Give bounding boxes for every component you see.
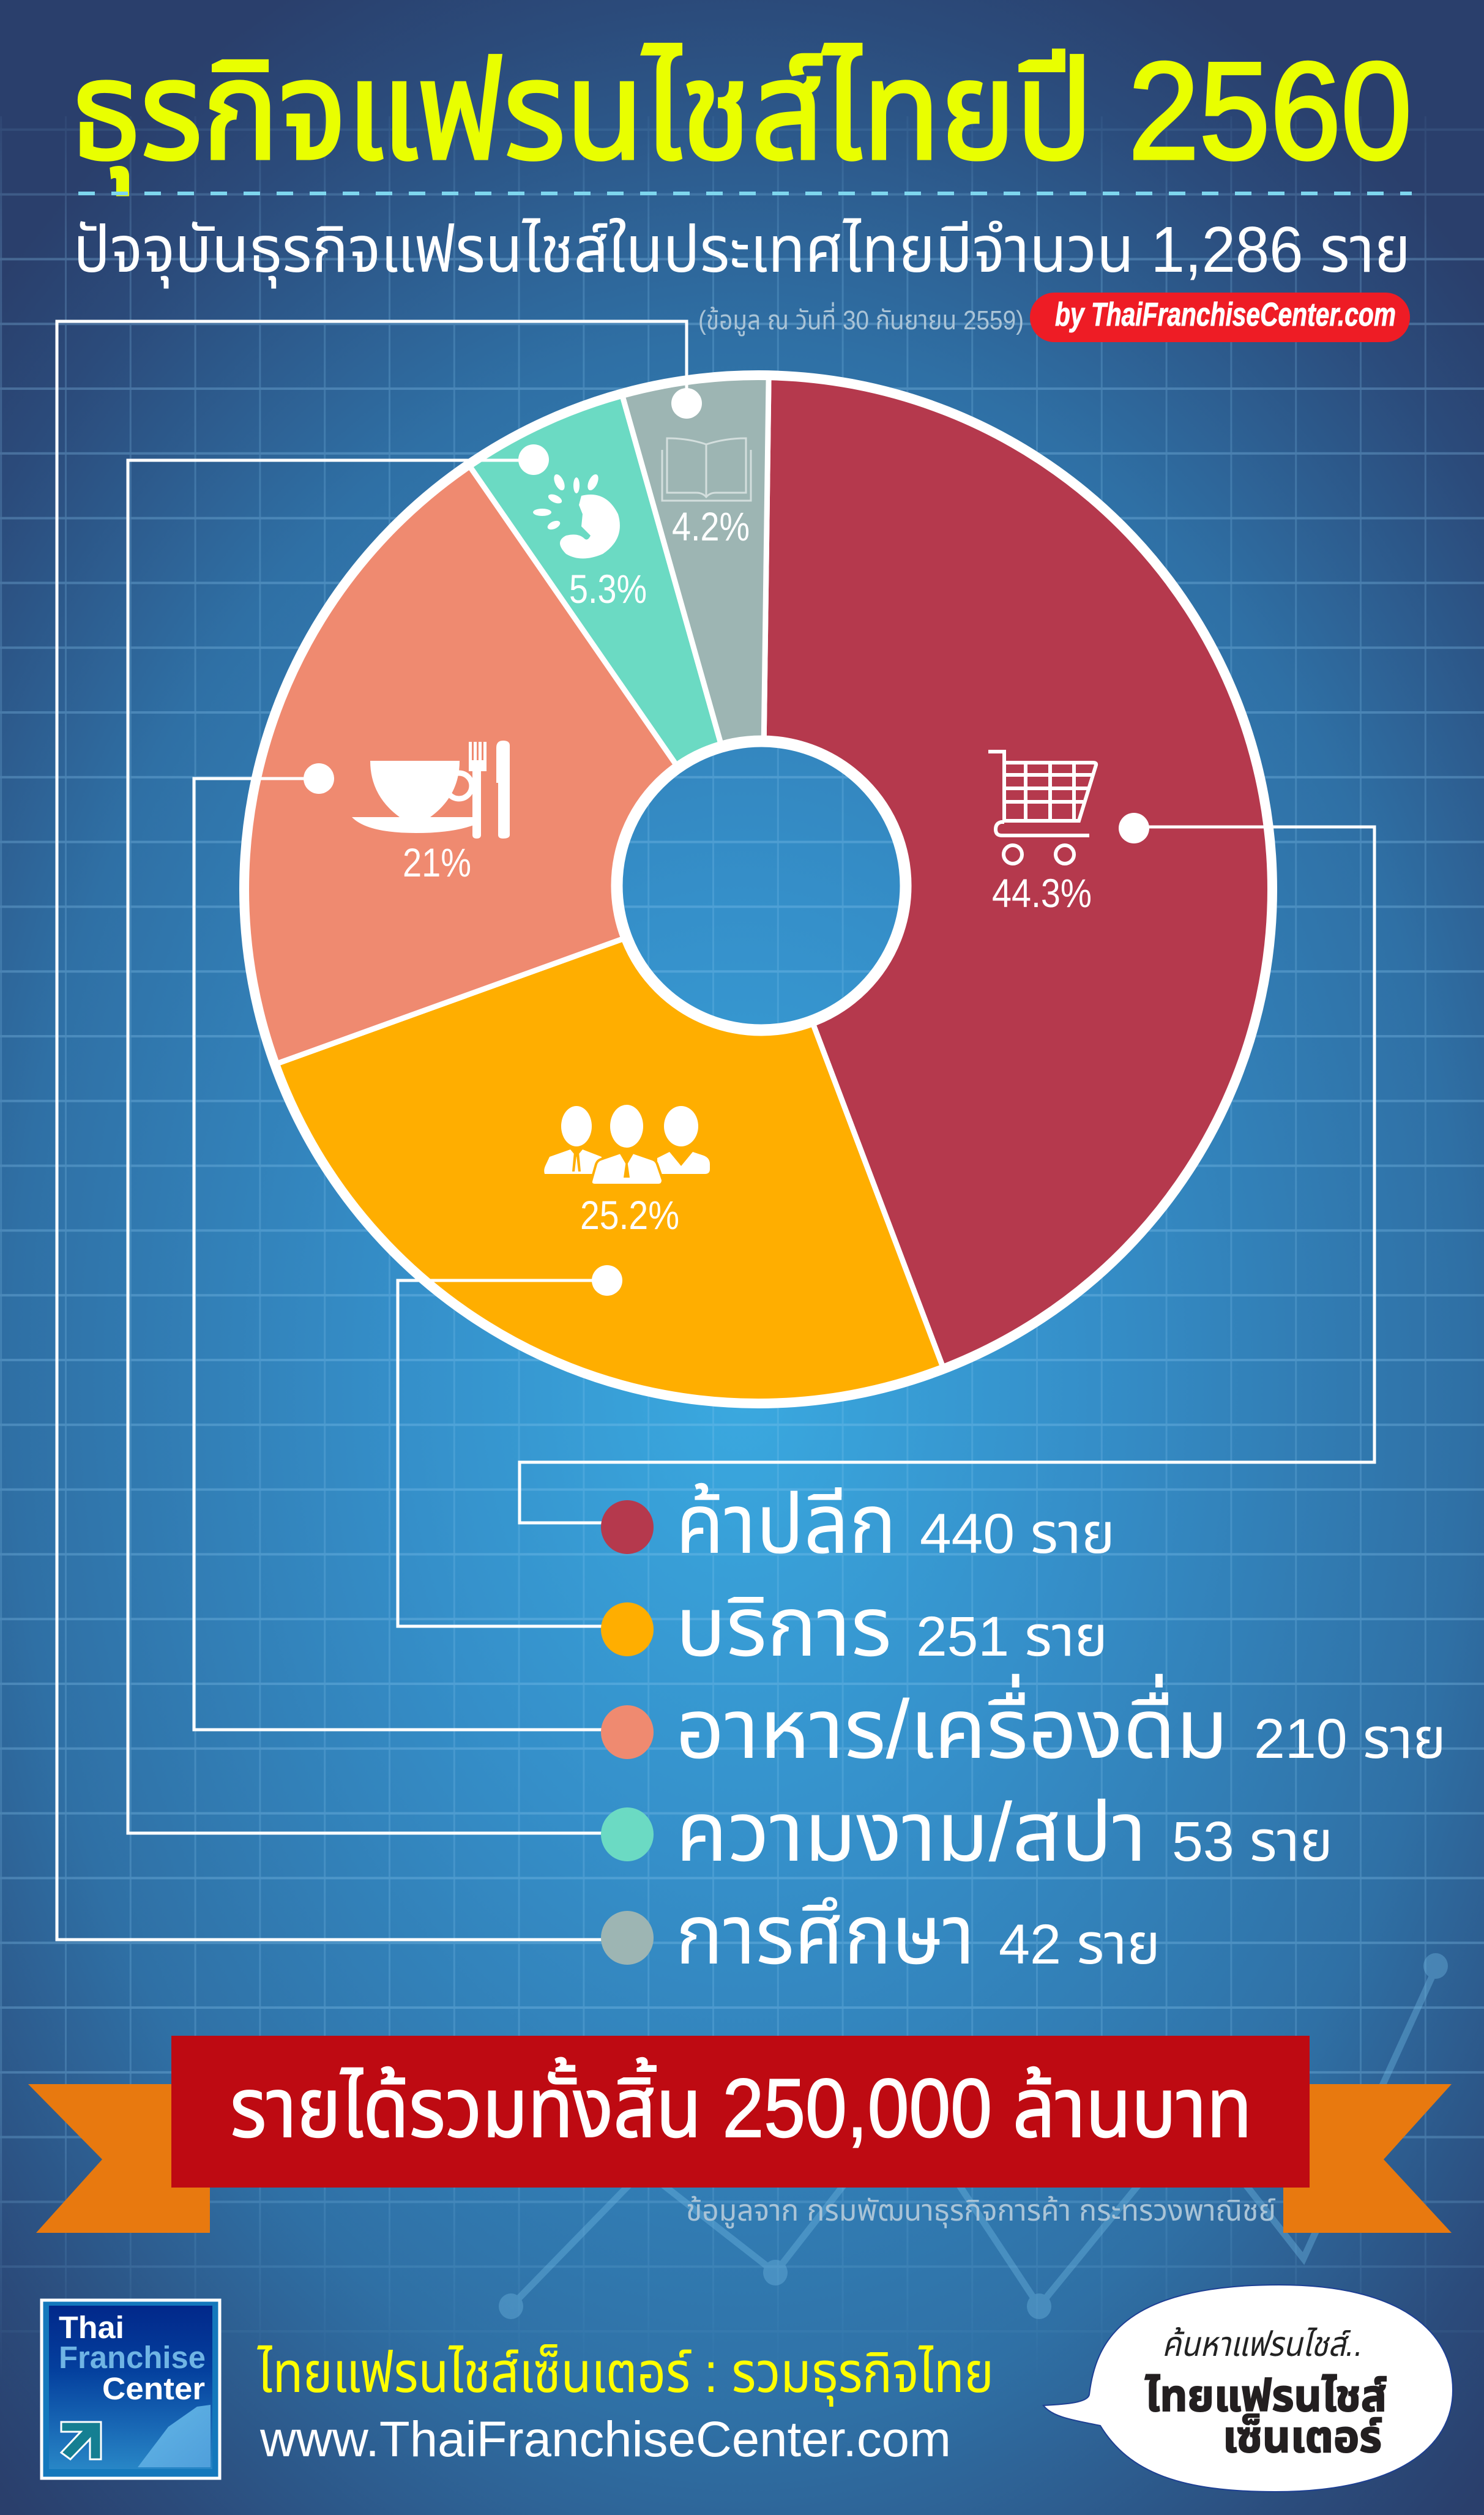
label 44.3%: 44.3% [992, 870, 1092, 916]
legend row: education: 42 ราย [999, 1913, 1160, 1976]
legend row: services: 251 ราย [916, 1605, 1108, 1668]
logo: Thai Franchise Center: Center [102, 2371, 205, 2406]
legend row: retail: ค้าปลีก [676, 1478, 897, 1571]
ribbon banner: total revenue [28, 2036, 1452, 2233]
footer website: www.ThaiFranchiseCenter.com [259, 2412, 951, 2467]
speech bubble [1043, 2285, 1453, 2492]
ribbon banner: total revenue: รายได้รวมทั้งสิ้น 250,000 ล้านบาท [230, 2057, 1252, 2154]
icon: open book [662, 438, 751, 501]
speech bubble: ค้นหาแฟรนไชส์.. [1162, 2325, 1363, 2363]
icon: shopping cart [988, 752, 1096, 864]
donut hole ring [617, 741, 906, 1030]
donut outer ring [244, 375, 1272, 1403]
legend row: education: การศึกษา [676, 1888, 975, 1981]
slice: food and drink 21% [249, 470, 673, 1065]
legend row: services [601, 1580, 1108, 1673]
icon: beauty face with leaves [533, 473, 620, 558]
label 21%: 21% [403, 840, 471, 885]
slice: beauty and spa 5.3% [469, 399, 717, 764]
connector lines [57, 321, 1374, 1940]
logo: Thai Franchise Center: Thai [59, 2310, 124, 2345]
legend row: beauty and spa: 53 ราย [1172, 1811, 1333, 1873]
dashed divider [78, 192, 1412, 195]
icon: cup and cutlery [352, 741, 510, 839]
label 5.3%: 5.3% [569, 566, 647, 611]
donut chart [239, 370, 1277, 1408]
legend row: services: บริการ [676, 1580, 892, 1673]
legend row: beauty and spa [601, 1785, 1333, 1878]
legend row: education [601, 1888, 1160, 1981]
logo: Thai Franchise Center: Franchise [59, 2340, 206, 2375]
logo: Thai Franchise Center [42, 2300, 220, 2478]
legend row: food and drink: อาหาร/เครื่องดื่ม [676, 1673, 1228, 1776]
icon: business people [544, 1105, 710, 1185]
legend row: retail [601, 1478, 1115, 1571]
label 25.2%: 25.2% [580, 1192, 679, 1238]
title: ธุรกิจแฟรนไชส์ไทยปี 2560 [71, 33, 1412, 195]
slice: retail 44.3% [766, 380, 1267, 1364]
footer tagline: ไทยแฟรนไชส์เซ็นเตอร์ : รวมธุรกิจไทย [256, 2342, 994, 2407]
label 4.2%: 4.2% [672, 504, 750, 549]
legend row: retail: 440 ราย [920, 1503, 1115, 1565]
speech bubble: เซ็นเตอร์ [1223, 2413, 1382, 2462]
background line chart [499, 1953, 1448, 2319]
slice: services 25.2% [280, 942, 945, 1399]
subtitle: ปัจจุบันธุรกิจแฟรนไชส์ในประเทศไทยมีจำนวน 1,286 ราย [73, 214, 1411, 289]
source note: ข้อมูลจาก กรมพัฒนาธุรกิจการค้า กระทรวงพาณิชย์ [686, 2195, 1276, 2229]
connector dots [304, 388, 1149, 1296]
legend row: food and drink: 210 ราย [1254, 1708, 1446, 1770]
legend row: beauty and spa: ความงาม/สปา [676, 1785, 1147, 1878]
data date note: (ข้อมูล ณ วันที่ 30 กันยายน 2559) [698, 302, 1024, 337]
legend row: food and drink [601, 1673, 1446, 1776]
slice: education 4.2% [621, 380, 772, 742]
speech bubble: ไทยแฟรนไชส์ [1145, 2372, 1387, 2421]
source pill [1030, 293, 1410, 342]
